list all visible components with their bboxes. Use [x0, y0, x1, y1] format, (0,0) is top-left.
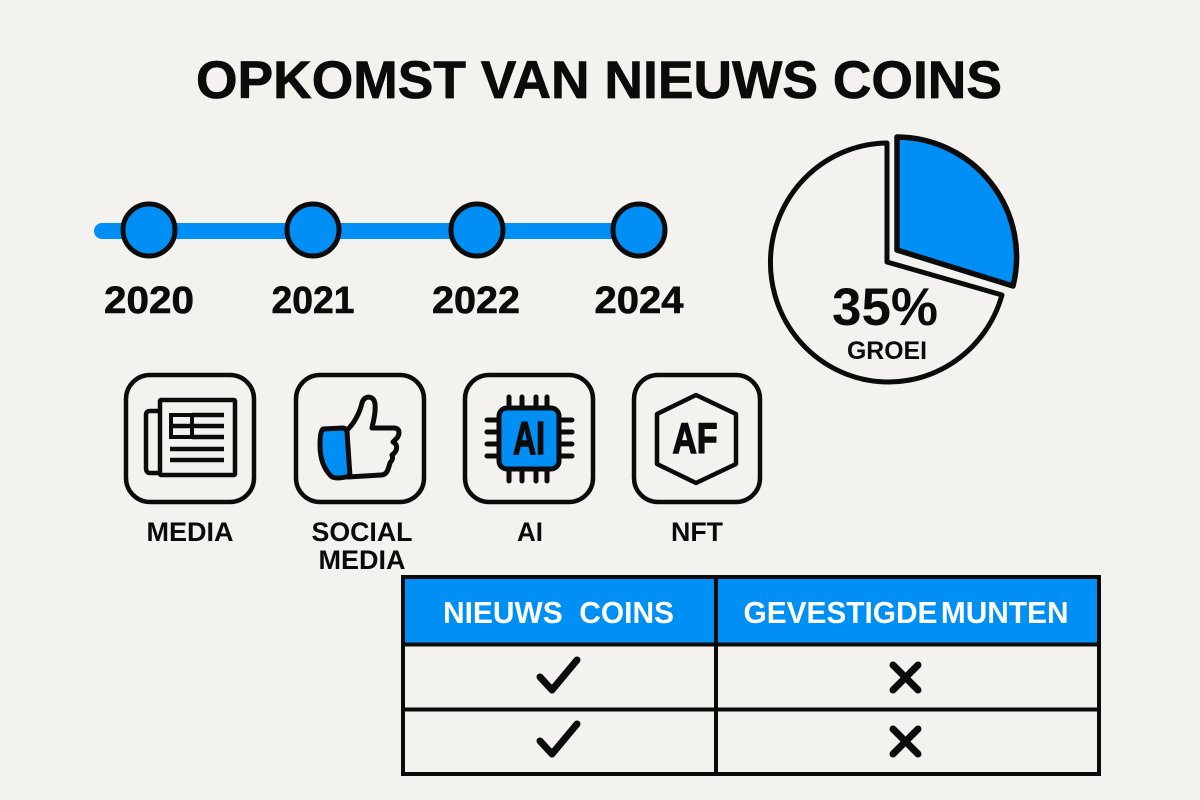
header: gevestigde munten: GEVESTIGDE MUNTEN — [744, 595, 1068, 630]
header: nieuws coins: NIEUWS COINS — [443, 595, 674, 630]
table header background — [403, 577, 1099, 644]
check row 1 — [540, 660, 577, 690]
timeline node 2024 — [613, 204, 665, 256]
pie main slice — [770, 143, 1002, 382]
timeline node 2020 — [123, 204, 175, 256]
comparison table — [403, 577, 1099, 774]
cross row 2 — [893, 729, 918, 754]
title: OPKOMST VAN NIEUWS COINS — [196, 51, 1002, 110]
year 2024: 2024 — [594, 280, 684, 322]
timeline bar — [102, 223, 640, 239]
percentage: 35% — [832, 278, 938, 337]
icon: NFT hexagon — [634, 375, 760, 502]
timeline — [102, 204, 684, 322]
chip lettering: AI — [513, 412, 545, 464]
year 2021: 2021 — [272, 280, 354, 322]
label: social media: MEDIA — [318, 545, 406, 575]
icon: AI chip — [465, 375, 593, 502]
icon: media newspaper — [126, 375, 254, 502]
table grid — [403, 577, 1099, 774]
timeline node 2022 — [451, 204, 503, 256]
icon: social media thumbs up — [296, 375, 424, 502]
year 2022: 2022 — [432, 280, 520, 322]
label: NFT: NFT — [671, 517, 724, 547]
year 2020: 2020 — [104, 280, 194, 322]
label: AI: AI — [517, 517, 543, 547]
pie blue slice — [897, 137, 1017, 286]
timeline node 2021 — [287, 204, 339, 256]
label: media: MEDIA — [146, 517, 234, 547]
hexagon lettering: AF — [672, 415, 718, 463]
cross row 1 — [893, 665, 918, 690]
pie chart — [770, 137, 1017, 382]
label: social media: SOCIAL — [312, 517, 412, 547]
check row 2 — [540, 724, 577, 754]
groei label: GROEI — [847, 337, 927, 365]
